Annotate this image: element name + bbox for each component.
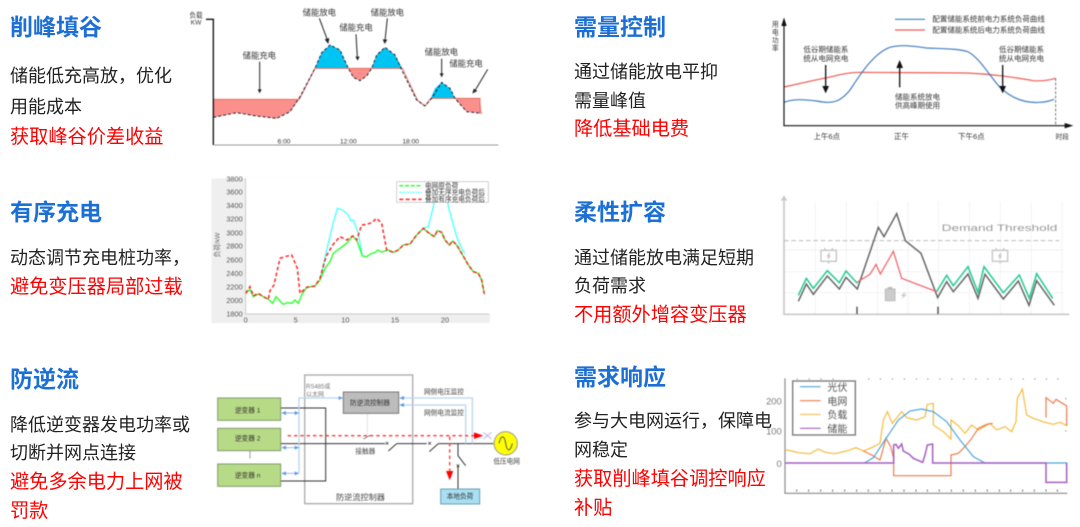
chart: power load before and after storage: 储能系统放电 [895,92,940,102]
chart: charging load curves: 0 [244,315,248,324]
text block: demand response: 获取削峰填谷调控响应 [574,469,766,490]
legend [397,181,488,204]
chart: anti-backflow wiring diagram: 接触器 [355,447,376,456]
chart: power load before and after storage: 率 [772,44,779,53]
text block: ordered charging: 动态调节充电桩功率， [10,248,190,268]
chart: power load before and after storage: 上午6点 [813,131,841,141]
inverter 2: 逆变器 2 [235,433,261,442]
chart: anti-backflow wiring diagram: 网侧电流监控 [424,408,464,417]
panel: anti-backflow [10,366,520,522]
inverter 2 [218,428,281,451]
local load box [441,489,480,504]
chart: anti-backflow wiring diagram: 以太网 [306,391,324,399]
chart: power load before and after storage: 配置储能系统前电力系统负荷曲线 [932,14,1045,24]
chart: anti-backflow wiring diagram: 网侧电压监控 [424,387,464,396]
chart: power load before and after storage: 统从电网充电 [803,53,849,63]
icon: battery discharge [885,287,907,301]
chart: charge and discharge load curve: 储能充电 [243,51,276,61]
chart: charge and discharge load curve: 12:00 [340,139,357,146]
icon: low voltage grid [494,432,517,455]
chart: power load before and after storage [772,14,1074,141]
legend: 电网原负荷 [425,181,459,190]
chart: power load before and after storage: 低谷期储能系 [803,44,849,54]
chart: PV, grid, load and storage curves [766,378,1068,494]
text block: peak shaving: 用能成本 [10,96,82,116]
chart: charging load curves [212,174,490,324]
chart: charge and discharge load curve: 储能放电 [371,7,404,17]
chart: charge and discharge load curve: 储能放电 [425,47,458,57]
chart: power load before and after storage: 用 [772,21,779,29]
chart: charging load curves: 2800 [226,242,243,251]
text block: demand response [574,411,772,519]
chart: power load before and after storage: 功 [772,37,779,45]
legend: 负载 [827,408,847,421]
chart: charge and discharge load curve: 6:00 [278,139,291,146]
text block: anti-backflow: 罚款 [10,501,48,522]
chart: charge and discharge load curve: 18:00 [402,139,419,146]
chart: PV, grid, load and storage curves: 200 [766,396,782,406]
text block: peak shaving [10,66,172,148]
chart: power load before and after storage: 时段 [1056,132,1069,141]
chart: charging load curves: 2000 [226,296,243,305]
text block: demand response: 补贴 [574,498,612,519]
chart: anti-backflow wiring diagram [216,374,520,506]
panel: demand control [574,14,1074,141]
chart: charge and discharge load curve: 储能放电 [303,7,336,17]
chart: charging load curves: 3800 [226,174,243,183]
anti-backflow controller box [343,392,399,413]
chart: power load before and after storage: 正午 [894,131,909,141]
text block: ordered charging [10,248,190,298]
chart: charging load curves: 10 [341,315,349,324]
chart: charging load curves: 3600 [226,187,243,196]
inverter 1 [218,398,281,420]
heading: flexible capacity expansion: 柔性扩容 [574,199,666,225]
legend: 光伏 [827,381,847,394]
text block: peak shaving: 获取峰谷价差收益 [10,127,164,148]
chart: PV, grid, load and storage curves: 0 [776,459,782,469]
inverter n [218,464,281,486]
text block: peak shaving: 储能低充高放，优化 [10,66,172,86]
chart: charge and discharge load curve: KW [191,20,202,27]
inverter n: 逆变器 n [235,471,261,480]
text block: demand control: 需量峰值 [574,90,646,110]
heading: ordered charging: 有序充电 [10,199,102,225]
chart: PV, grid, load and storage curves: 100 [766,426,782,436]
heading: demand control: 需量控制 [574,14,666,40]
chart: charging load curves: 3200 [226,214,243,223]
chart: anti-backflow wiring diagram: RS485或 [306,382,330,390]
chart: charging load curves: 2400 [226,269,243,278]
text block: anti-backflow [10,414,190,522]
text block: demand response: 网稳定 [574,440,628,460]
anti-backflow controller box: 防逆流控制器 [350,398,390,407]
chart: charging load curves: 1800 [226,309,243,318]
chart: power load before and after storage: 下午6点 [958,131,985,141]
chart: anti-backflow wiring diagram: 防逆流控制器 [336,492,385,502]
legend: 叠加无序充电负荷后 [425,188,485,197]
chart: demand threshold: Demand Threshold [942,223,1057,233]
chart: charge and discharge load curve: 储能充电 [449,58,483,68]
panel: peak shaving [10,7,499,148]
local load box: 本地负荷 [447,492,474,501]
text block: demand control: 通过储能放电平抑 [574,62,718,82]
legend: 储能 [827,422,847,435]
chart: anti-backflow wiring diagram: 低压电网 [493,456,520,465]
icon: charger left [821,248,836,264]
legend: 电网 [827,395,847,408]
legend: 叠加有序充电负荷后 [425,195,485,204]
chart: charging load curves: 2200 [226,282,243,291]
chart: demand threshold [780,196,1070,316]
chart: charge and discharge load curve: 负载 [189,10,203,19]
chart: charging load curves: 负荷/kW [212,232,221,257]
text block: anti-backflow: 避免多余电力上网被 [10,472,183,492]
chart: charge and discharge load curve [189,7,499,146]
text block: demand control [574,62,718,140]
text block: anti-backflow: 降低逆变器发电功率或 [10,414,190,434]
chart: power load before and after storage: 配置储能系统后电力系统负荷曲线 [932,25,1045,35]
text block: demand response: 参与大电网运行，保障电 [574,411,772,431]
chart: charging load curves: 15 [391,315,399,324]
heading: demand response: 需求响应 [574,364,666,390]
chart: power load before and after storage: 低谷期储能系 [999,44,1044,54]
chart: charging load curves: 20 [441,315,449,324]
chart: charging load curves: 2600 [226,255,243,264]
text block: demand control: 降低基础电费 [574,119,689,140]
heading: anti-backflow: 防逆流 [10,366,79,392]
chart: charging load curves: 3000 [226,228,243,237]
icon: charger right [992,248,1008,264]
text block: anti-backflow: 切断并网点连接 [10,443,136,463]
chart: power load before and after storage: 统从电网充电 [999,53,1044,63]
text block: flexible capacity expansion: 通过储能放电满足短期 [574,248,754,268]
panel: ordered charging [10,174,490,324]
text block: flexible capacity expansion: 负荷需求 [574,276,646,296]
chart: power load before and after storage: 供高峰期使用 [895,100,940,110]
panel: demand response [574,364,1068,519]
inverter 1: 逆变器 1 [235,406,261,415]
heading: peak shaving: 削峰填谷 [10,14,102,40]
chart: power load before and after storage: 电 [772,28,779,37]
text block: ordered charging: 避免变压器局部过载 [10,276,183,298]
chart: charge and discharge load curve: 储能充电 [339,23,373,33]
panel: flexible capacity expansion [574,196,1070,326]
text block: flexible capacity expansion: 不用额外增容变压器 [574,304,747,326]
chart: charging load curves: 3400 [226,201,243,210]
chart: charging load curves: 5 [294,315,298,324]
legend [793,381,855,435]
text block: flexible capacity expansion [574,248,754,326]
